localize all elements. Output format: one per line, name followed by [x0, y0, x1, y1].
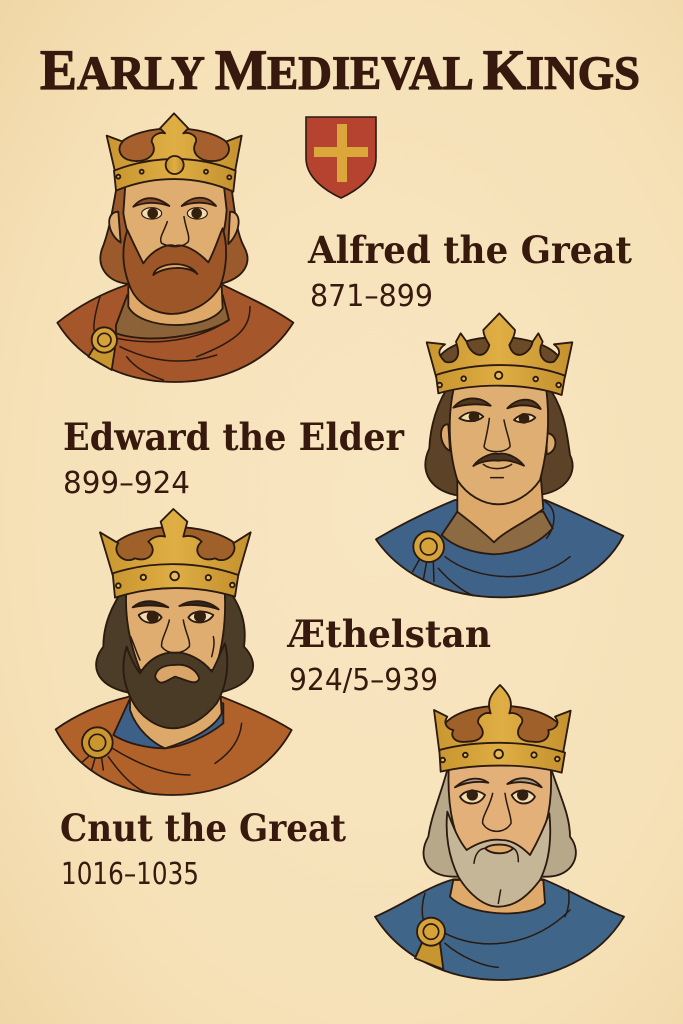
name: Edward the Elder: Edward the Elder: [63, 415, 404, 459]
brooch: [415, 918, 445, 969]
beard lines: [474, 848, 518, 903]
moustache: [473, 454, 524, 466]
portrait: Edward the Elder: [376, 313, 623, 597]
crown: [107, 113, 242, 192]
name: Æthelstan: Æthelstan: [286, 612, 491, 656]
robe: [57, 284, 293, 382]
face: [449, 758, 551, 857]
eyebrows: [133, 601, 219, 609]
dates: Edward: 899–924: [63, 466, 190, 501]
robe folds: [438, 502, 570, 596]
mouth: [485, 845, 513, 853]
brooch: [88, 327, 117, 370]
neck: [128, 287, 223, 325]
robe: [376, 500, 623, 597]
beard: [123, 643, 227, 728]
name: Alfred the Great: Alfred the Great: [307, 228, 632, 272]
dates: Alfred: 871–899: [310, 279, 433, 314]
icon: heraldic shield: [306, 117, 376, 198]
face lines: [131, 637, 214, 660]
mouth: [153, 264, 197, 275]
dates: Æthelstan: 924/5–939: [289, 663, 438, 698]
hair: [424, 760, 576, 877]
dates: Cnut: 1016–1035: [61, 857, 199, 892]
eyebrows: [133, 198, 216, 207]
neck: [130, 697, 222, 748]
nose: [483, 793, 511, 831]
robe: [375, 879, 624, 980]
face: [123, 175, 227, 263]
collar: [116, 295, 229, 338]
eyes: [460, 789, 535, 803]
portrait: Cnut the Great: [375, 685, 624, 980]
nose: [484, 418, 510, 452]
ears: [109, 212, 239, 244]
brooch: [413, 531, 444, 582]
nose: [161, 217, 189, 247]
crown: [434, 685, 571, 773]
eyebrows: [453, 398, 541, 409]
mouth and chin: [483, 464, 512, 478]
name: Cnut the Great: Cnut the Great: [60, 806, 346, 850]
mouth: [155, 665, 199, 683]
eyes: [139, 610, 213, 623]
beard: [123, 228, 226, 314]
face: [450, 380, 548, 504]
hair: [425, 382, 573, 495]
portrait: Alfred the Great: [57, 113, 293, 382]
crown: [100, 509, 251, 598]
hair: [100, 177, 247, 284]
collar: [442, 512, 553, 554]
robe folds: [108, 723, 242, 793]
eyes: [459, 411, 535, 424]
robe: [56, 697, 292, 795]
beard: [447, 812, 550, 907]
brooch: [82, 727, 113, 770]
portrait: Æthelstan: [56, 509, 292, 795]
ears: [441, 424, 555, 454]
eyebrows: [455, 778, 542, 787]
hair: [96, 583, 253, 693]
crown: [427, 313, 572, 395]
robe folds: [422, 890, 570, 967]
neck: [450, 880, 545, 913]
title: EARLY MEDIEVAL KINGS: [40, 39, 640, 102]
robe folds: [94, 297, 250, 380]
neck: [457, 475, 543, 542]
nose: [162, 620, 190, 653]
blue collar: [113, 700, 223, 748]
face: [126, 580, 225, 670]
eyes: [142, 208, 207, 219]
